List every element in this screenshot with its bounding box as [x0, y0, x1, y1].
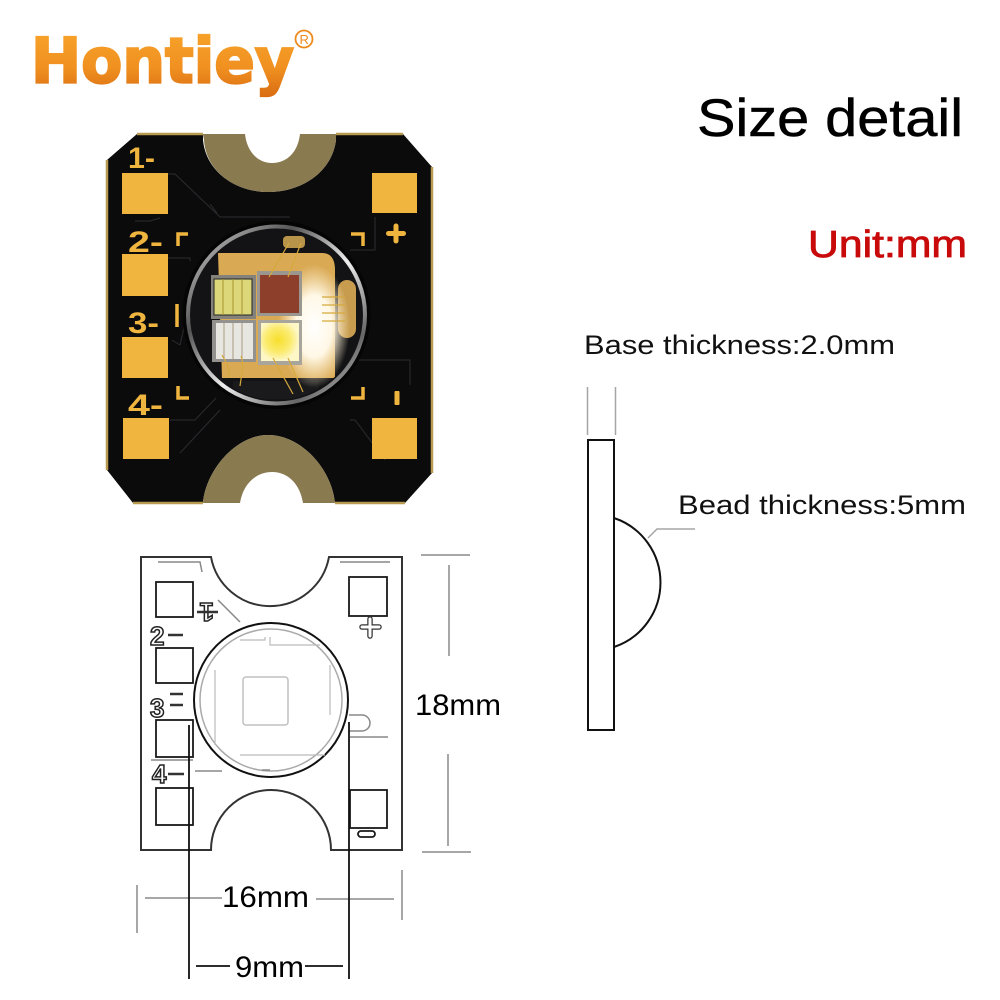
- solder pad 3: [122, 337, 168, 378]
- top mounting notch: [203, 134, 336, 192]
- bottom mounting notch: [203, 435, 335, 503]
- dimension: 18mm: 18mm: [415, 689, 501, 722]
- label: base thickness: Base thickness:2.0mm: [584, 330, 895, 360]
- logo: Hontiey: Hontiey: [31, 24, 294, 98]
- board edge plating: [107, 134, 432, 503]
- pad labels: 2-: [128, 226, 163, 259]
- pin labels: [150, 597, 214, 789]
- pin labels: 1: [200, 597, 214, 627]
- emitter square: [243, 677, 288, 725]
- plus mark: [362, 619, 379, 636]
- dimension: 16mm: 16mm: [222, 881, 309, 914]
- corner marks: [177, 234, 363, 398]
- pad labels: 4-: [128, 389, 163, 422]
- dimension: 16mm: [137, 870, 402, 933]
- LED chip: red: [260, 275, 299, 313]
- title: Size detail: Size detail: [697, 89, 963, 148]
- solder pad plus: [372, 173, 417, 213]
- pcb board: [107, 134, 432, 503]
- pin labels: 3: [150, 693, 164, 723]
- plus mark: [388, 226, 404, 241]
- wires and small traces: [151, 562, 390, 771]
- dimension: 18mm: [415, 555, 501, 852]
- LED chip: green-yellow: [214, 279, 252, 315]
- pad labels: [128, 142, 163, 422]
- pin dashes: [168, 612, 218, 774]
- board outline: [141, 557, 402, 850]
- lens silver ring: [188, 226, 365, 404]
- solder pad minus: [372, 418, 417, 459]
- bond wires: [222, 243, 345, 394]
- pin labels: 4: [152, 759, 167, 789]
- logo: Hontiey: R: [300, 32, 309, 47]
- LED chip: yellow: [261, 323, 299, 361]
- line drawing: module top view: [141, 557, 402, 850]
- lens details: [215, 637, 330, 755]
- pin labels: 2: [150, 621, 164, 651]
- base plate: [588, 440, 614, 730]
- pads: [156, 577, 387, 837]
- minus mark: [394, 391, 400, 405]
- side view drawing: [588, 387, 695, 730]
- pad labels: 1-: [128, 142, 155, 175]
- solder pad 2: [122, 254, 168, 296]
- bead ring: [194, 623, 348, 777]
- label: bead thickness: Bead thickness:5mm: [678, 490, 966, 520]
- bead leader line: [648, 529, 695, 538]
- base ticks: [588, 387, 616, 435]
- solder pad 1: [122, 173, 168, 214]
- inner ring: [200, 629, 342, 771]
- dimension: 9mm: [189, 722, 349, 984]
- unit label: Unit:mm: [808, 224, 967, 266]
- lens: [182, 221, 370, 409]
- photo: LED module PCB: [107, 134, 432, 503]
- pad labels: 3-: [128, 307, 159, 340]
- dimension: 9mm: 9mm: [235, 951, 304, 984]
- bead dome: [614, 518, 660, 647]
- LED chip: white: [216, 323, 253, 359]
- solder pad 4: [123, 418, 169, 459]
- circuit traces: [135, 174, 410, 460]
